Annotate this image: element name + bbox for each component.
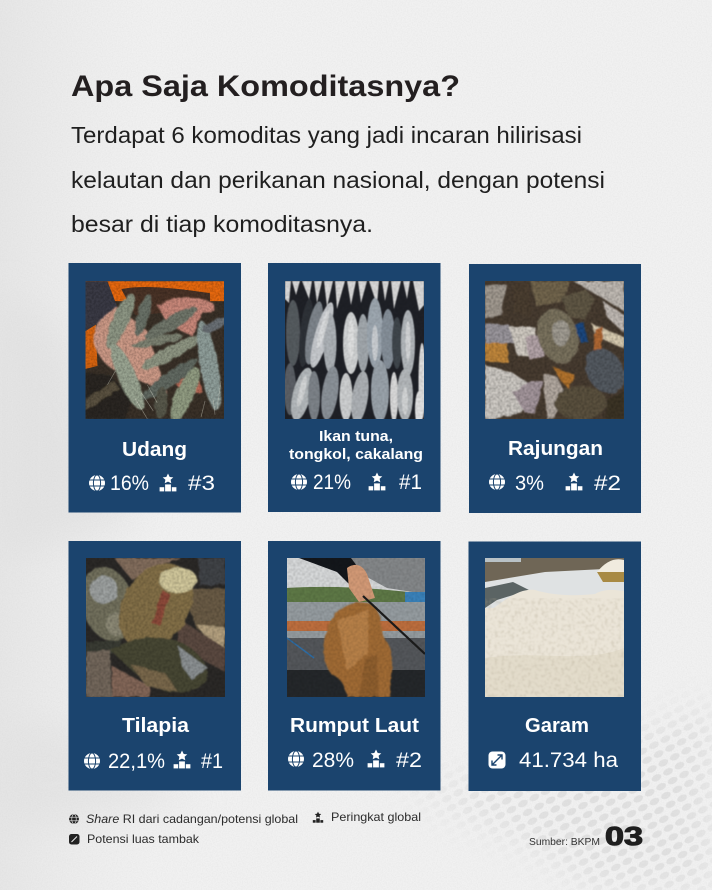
title: Apa Saja Komoditasnya?	[71, 70, 460, 103]
stats: 41.734 ha	[519, 749, 618, 772]
icon: rank	[313, 812, 323, 823]
stats	[291, 471, 422, 494]
icon: area	[69, 834, 80, 844]
photo: shrimp	[86, 281, 224, 419]
stats: 28%	[312, 749, 354, 772]
stats: 3%	[515, 472, 544, 495]
legend: area: Potensi luas tambak	[87, 832, 200, 846]
icon: area expand	[488, 752, 506, 768]
stats: 16%	[110, 472, 149, 495]
highlights	[295, 309, 410, 415]
legend: rank: Peringkat global	[331, 810, 421, 824]
name: Ikan tuna,	[319, 429, 393, 445]
name: Garam	[525, 715, 589, 737]
name: tongkol, cakalang	[289, 447, 423, 463]
photo: fish	[285, 281, 424, 419]
name: Rajungan	[508, 438, 603, 460]
stats: #1	[201, 750, 223, 773]
stats: #2	[396, 749, 422, 772]
legend: share: Share RI dari cadangan/potensi global	[86, 812, 298, 826]
intro text	[71, 122, 605, 237]
stats: 21%	[313, 471, 351, 494]
panel: Tilapia	[68, 541, 241, 790]
panel: Rajungan	[469, 264, 641, 513]
panel: Garam	[468, 542, 641, 791]
name: Udang	[122, 439, 187, 461]
name: Tilapia	[122, 715, 190, 737]
source: Sumber: BKPM	[529, 836, 600, 848]
page number: 03	[605, 823, 643, 851]
stats: #2	[594, 472, 621, 495]
intro text: kelautan dan perikanan nasional, dengan potensi	[71, 167, 605, 193]
stats: #1	[399, 471, 422, 494]
stats: 22,1%	[108, 750, 165, 773]
name	[289, 429, 423, 463]
icon: globe	[69, 814, 79, 824]
panel: Rumput Laut	[268, 541, 440, 790]
photo: tilapia	[86, 558, 225, 697]
legend	[69, 810, 421, 846]
stats	[89, 472, 215, 495]
photo: salt	[485, 558, 624, 697]
stats	[288, 749, 422, 772]
photo: seaweed	[287, 558, 425, 697]
panel: Ikan tuna, tongkol, cakalang	[268, 263, 440, 512]
intro text: besar di tiap komoditasnya.	[71, 211, 373, 237]
panel: Udang	[68, 263, 241, 512]
tails	[285, 281, 424, 311]
stats	[84, 750, 223, 773]
photo: crabs	[485, 281, 624, 419]
stats	[489, 472, 621, 495]
name: Rumput Laut	[290, 715, 419, 737]
stats: #3	[188, 472, 215, 495]
intro text: Terdapat 6 komoditas yang jadi incaran hilirisasi	[71, 122, 582, 148]
